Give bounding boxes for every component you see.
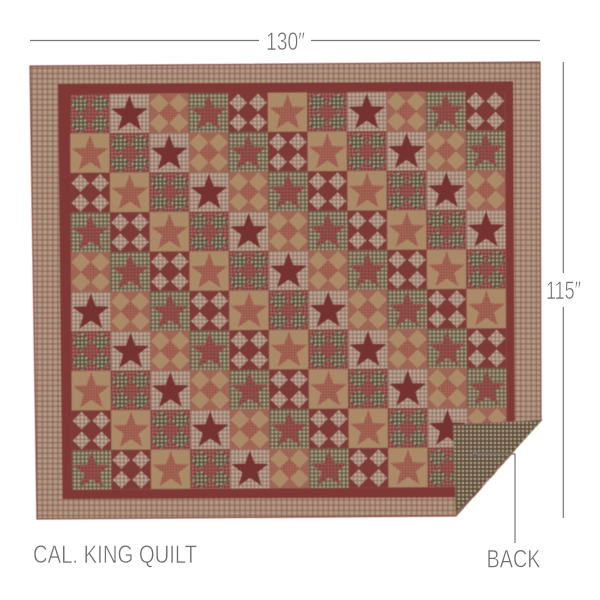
dimension: width line and 130 inch label: 130″	[266, 28, 305, 56]
row 4	[71, 210, 506, 252]
row 1	[70, 91, 505, 133]
row 2	[70, 131, 505, 173]
callout: leader line to quilt back	[473, 452, 515, 543]
quilt	[30, 62, 545, 522]
row 9	[72, 408, 507, 450]
row 8	[71, 368, 506, 410]
outer plaid border	[30, 62, 541, 519]
white cut-away beyond the fold	[457, 420, 545, 522]
row 3	[70, 170, 505, 212]
row 10	[72, 447, 507, 490]
row 5	[71, 249, 506, 292]
folded corner showing quilt back	[453, 420, 542, 514]
red inner frame	[58, 82, 515, 499]
label: CAL. KING QUILT: CAL. KING QUILT	[33, 541, 197, 569]
row 7	[71, 329, 506, 371]
patchwork block grid	[70, 91, 507, 490]
dimension: height line and 115 inch label: 115″	[546, 277, 581, 305]
label: BACK: BACK	[486, 546, 541, 574]
row 6	[71, 289, 506, 331]
